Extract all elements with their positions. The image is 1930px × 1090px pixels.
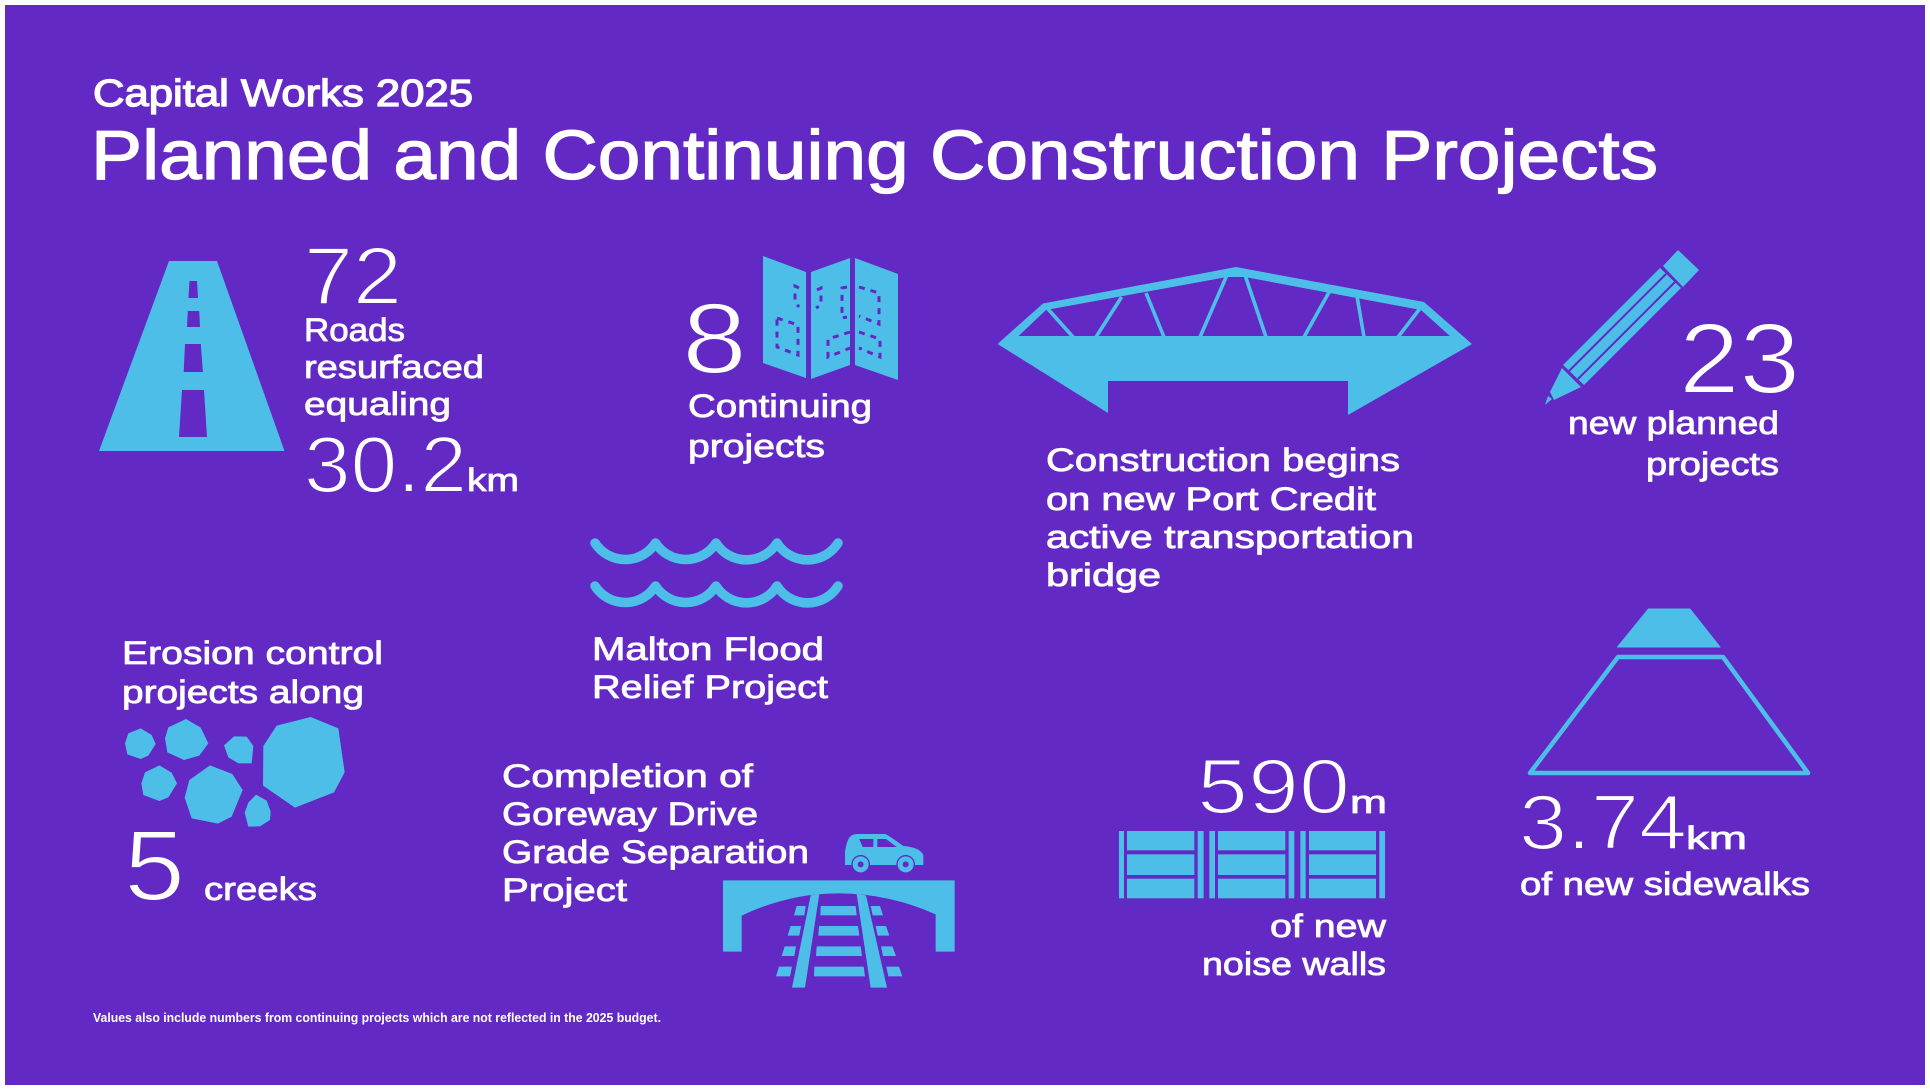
stat: 590 m: 590 bbox=[1197, 742, 1350, 830]
label: malton flood relief project: Relief Project bbox=[592, 669, 828, 705]
label: continuing projects: Continuing bbox=[688, 388, 872, 424]
label: bridge description bbox=[1046, 442, 1414, 593]
icon: truss bridge bbox=[998, 267, 1472, 415]
footnote: Values also include numbers from continuing projects which are not reflected in the 2025 budget. bbox=[93, 1011, 661, 1025]
label: of new noise walls: noise walls bbox=[1202, 946, 1386, 982]
label: bridge description: Construction begins bbox=[1046, 442, 1400, 478]
label: goreway description bbox=[502, 758, 809, 908]
stat: 30.2 km: 30.2 bbox=[304, 420, 467, 509]
panel: new sidewalks bbox=[1519, 609, 1810, 902]
label: goreway description: Grade Separation bbox=[502, 834, 809, 870]
panel: continuing projects bbox=[682, 256, 898, 464]
stat: 72: 72 bbox=[304, 231, 402, 322]
icon: road bbox=[99, 261, 284, 451]
icon: water waves bbox=[595, 543, 838, 603]
label: of new noise walls bbox=[1202, 908, 1387, 982]
stat: 8: 8 bbox=[682, 283, 747, 395]
label: roads resurfaced equaling: resurfaced bbox=[304, 349, 484, 385]
label: of new sidewalks: of new sidewalks bbox=[1520, 866, 1810, 902]
heading block bbox=[91, 73, 1658, 194]
stat: 3.74 km bbox=[1519, 778, 1747, 866]
label: continuing projects: projects bbox=[688, 428, 825, 464]
label: bridge description: on new Port Credit bbox=[1046, 481, 1376, 517]
stat: 5: 5 bbox=[124, 810, 185, 922]
stat: 590 m bbox=[1197, 742, 1387, 830]
panel: port credit bridge bbox=[998, 267, 1472, 593]
icon: folded map bbox=[763, 256, 898, 380]
stat: 23: 23 bbox=[1679, 303, 1800, 415]
stat: 3.74 km: 3.74 bbox=[1519, 778, 1687, 866]
icon: overpass with car and rail bbox=[723, 834, 955, 988]
label: roads resurfaced equaling: equaling bbox=[304, 386, 451, 422]
stat: 3.74 km: km bbox=[1686, 820, 1747, 856]
panel: erosion control bbox=[122, 635, 383, 922]
label: new planned projects bbox=[1568, 405, 1779, 482]
stat: 30.2 km: km bbox=[467, 462, 519, 498]
main title: Planned and Continuing Construction Projects bbox=[91, 116, 1658, 194]
panel: new planned projects bbox=[1545, 250, 1800, 482]
label: continuing projects bbox=[688, 388, 872, 464]
panel: roads resurfaced bbox=[99, 231, 519, 509]
panel: malton flood relief bbox=[592, 543, 838, 705]
label: new planned projects: projects bbox=[1646, 446, 1779, 482]
label: goreway description: Goreway Drive bbox=[502, 796, 758, 832]
label: roads resurfaced equaling: Roads bbox=[304, 312, 405, 348]
label: bridge description: bridge bbox=[1046, 557, 1161, 593]
label: erosion control projects along: projects along bbox=[122, 674, 364, 710]
stat: 590 m: m bbox=[1350, 784, 1387, 820]
panel: noise walls bbox=[1119, 742, 1387, 982]
icon: pencil bbox=[1545, 250, 1699, 405]
label: roads resurfaced equaling bbox=[304, 312, 484, 422]
icon: noise wall bbox=[1119, 831, 1385, 898]
label: goreway description: Completion of bbox=[502, 758, 754, 794]
icon: rocks bbox=[125, 717, 345, 827]
label: malton flood relief project bbox=[592, 631, 828, 705]
label: new planned projects: new planned bbox=[1568, 405, 1779, 441]
panel: goreway drive grade separation bbox=[502, 758, 955, 988]
label: goreway description: Project bbox=[502, 872, 627, 908]
label: bridge description: active transportation bbox=[1046, 519, 1414, 555]
label: creeks: creeks bbox=[204, 871, 317, 907]
label: erosion control projects along bbox=[122, 635, 383, 710]
icon: sidewalk perspective bbox=[1530, 609, 1808, 773]
label: erosion control projects along: Erosion control bbox=[122, 635, 383, 671]
label: of new noise walls: of new bbox=[1270, 908, 1387, 944]
eyebrow title: Capital Works 2025 bbox=[93, 73, 473, 115]
label: malton flood relief project: Malton Flood bbox=[592, 631, 824, 667]
